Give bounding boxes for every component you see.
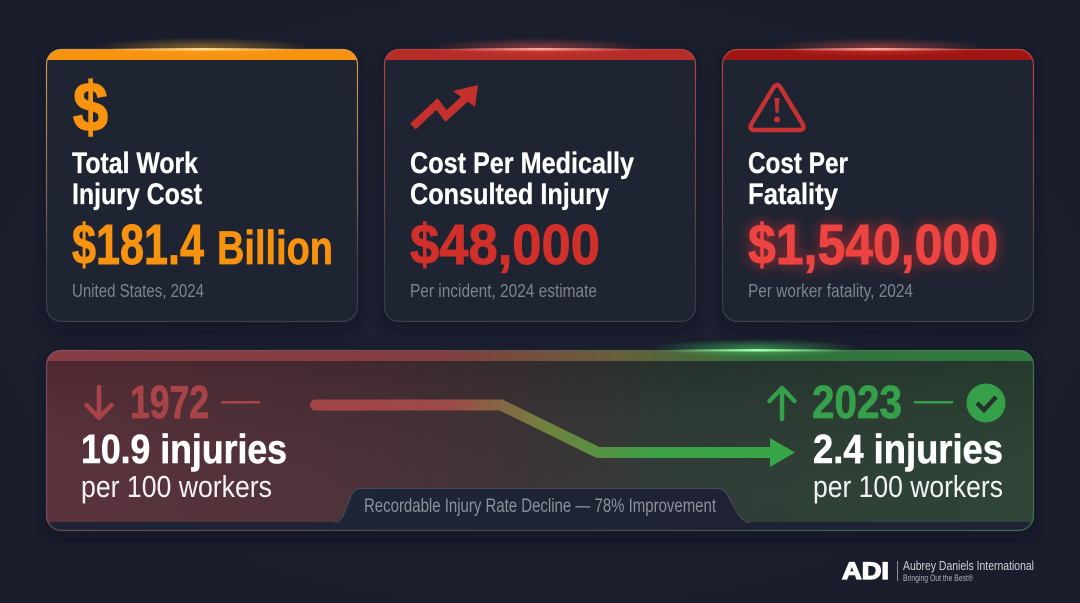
year 2023: 2023: [812, 376, 902, 428]
value: 10.9 injuries: 10.9 injuries: [81, 426, 287, 472]
value: 181.4 billion: [72, 213, 333, 277]
value: 2.4 injuries: 2.4 injuries: [813, 426, 1003, 472]
icon: rising trend arrow: [413, 85, 478, 126]
caption: Per worker fatality, 2024: [748, 281, 913, 301]
logo: ADI Aubrey Daniels International: [842, 558, 1034, 585]
value: 181.4 billion: Billion: [217, 221, 333, 274]
heading: total work injury cost: [72, 147, 202, 211]
heading: cost per fatality: Fatality: [748, 178, 838, 211]
heading: cost per medically consulted injury: [410, 147, 634, 211]
icon: check badge: [966, 384, 1006, 422]
icon: down arrow: [86, 387, 112, 418]
logo: ADI Aubrey Daniels International: Aubrey Daniels International: [903, 558, 1034, 573]
label tab: Recordable Injury Rate Decline — 78% Improvement: [364, 496, 717, 517]
year 1972: 1972: [130, 376, 209, 428]
caption: Per incident, 2024 estimate: [410, 281, 597, 301]
icon: dollar sign: $: [73, 68, 108, 146]
label tab: [335, 488, 750, 530]
arrow: declining trend line: [310, 400, 795, 467]
panel: injury rate decline: [46, 339, 1034, 538]
panel: cost per medically consulted injury: [384, 38, 696, 329]
icon: up arrow: [770, 388, 794, 419]
value: 1,540,000: $1,540,000: [748, 213, 998, 277]
value: 1,540,000: $1,540,000: [748, 213, 998, 277]
unit: per 100 workers: [813, 469, 1003, 504]
value: 181.4 billion: $181.4: [72, 213, 204, 277]
heading: cost per medically consulted injury: Cost Per Medically: [410, 147, 634, 180]
panel: total work injury cost: [46, 38, 358, 329]
panel: cost per fatality: [722, 38, 1034, 329]
heading: cost per medically consulted injury: Consulted Injury: [410, 178, 609, 211]
unit: per 100 workers: [81, 469, 272, 504]
logo: ADI Aubrey Daniels International: ADI: [842, 558, 889, 585]
logo: ADI Aubrey Daniels International: Bringing Out the Best®: [903, 573, 973, 583]
heading: cost per fatality: Cost Per: [748, 147, 848, 180]
2023 stat: [770, 376, 1006, 504]
heading: total work injury cost: Total Work: [72, 147, 198, 180]
1972 stat: [81, 376, 287, 504]
caption: United States, 2024: [72, 281, 204, 301]
heading: total work injury cost: Injury Cost: [72, 178, 202, 211]
heading: cost per fatality: [748, 147, 848, 211]
value: 48,000: $48,000: [410, 213, 600, 277]
icon: warning triangle: [751, 85, 803, 130]
